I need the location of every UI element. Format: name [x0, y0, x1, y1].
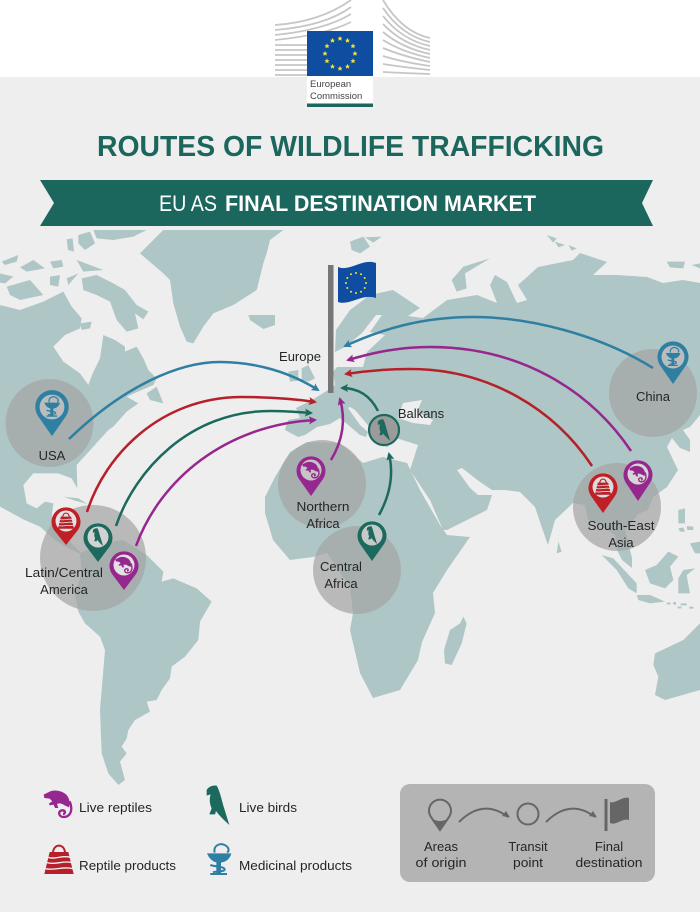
region labels [25, 349, 671, 597]
pin: USA medicinal [35, 390, 69, 436]
key labels: Areas [424, 839, 458, 854]
title: ROUTES OF WILDLIFE TRAFFICKING [97, 131, 604, 163]
region labels: Africa [324, 576, 358, 591]
legend: live birds: Live birds [239, 800, 298, 815]
European Commission logo [275, 0, 430, 107]
Africa [265, 442, 470, 698]
world map [0, 230, 700, 785]
region circles [6, 349, 697, 614]
header band [0, 0, 700, 77]
banner: EU AS [159, 191, 217, 216]
flagpole and EU flag [328, 262, 376, 393]
region labels: Asia [608, 535, 634, 550]
key labels: point [513, 855, 543, 870]
region labels: Northern [296, 499, 350, 514]
European Commission logo: European [310, 79, 351, 90]
region labels: Balkans [398, 406, 445, 421]
North America and Arctic [0, 230, 315, 553]
key panel [400, 784, 655, 882]
region labels: Central [320, 559, 362, 574]
arrowheads [502, 811, 597, 818]
icon: origin pin [429, 800, 451, 831]
Asian and Arctic islands [350, 235, 700, 292]
region labels: Africa [306, 516, 340, 531]
Black Sea [398, 400, 433, 425]
pin: South-East Asia reptile products [588, 473, 618, 513]
arrow: origin to transit [459, 809, 508, 822]
legend: reptile products [44, 846, 177, 874]
banner: FINAL DESTINATION MARKET [225, 191, 537, 216]
icon: destination flag [604, 798, 629, 831]
pin: China medicinal [658, 341, 688, 384]
key labels: Transit [508, 839, 548, 854]
region labels: China [636, 389, 671, 404]
legend: live birds [207, 786, 298, 825]
banner [40, 180, 653, 226]
legend: medicinal products: Medicinal products [239, 858, 353, 873]
region labels: Latin/Central [25, 565, 103, 580]
pin: Latin America live reptiles [110, 551, 138, 590]
key labels [416, 839, 642, 870]
transit point: Balkans [369, 415, 399, 445]
icon: transit circle [518, 804, 538, 824]
key labels: Final [595, 839, 623, 854]
legend: medicinal products [207, 844, 353, 875]
pin: Latin America reptile products [52, 507, 80, 545]
pin: Central Africa live birds [358, 521, 386, 561]
key labels: destination [576, 855, 642, 870]
region labels: America [40, 582, 89, 597]
Indian Ocean islands and Australia [444, 508, 700, 700]
region labels: USA [39, 448, 66, 463]
legend: reptile products: Reptile products [79, 858, 177, 873]
route arrows [69, 317, 653, 546]
pin: Northern Africa live reptiles [296, 456, 326, 496]
South America [75, 540, 212, 785]
pin: South-East Asia live reptiles [624, 460, 652, 501]
Eurasia [285, 253, 700, 568]
region labels: South-East [588, 518, 655, 533]
legend: live reptiles: Live reptiles [79, 800, 153, 815]
region labels: Europe [279, 349, 321, 364]
European Commission logo: Commission [310, 91, 362, 102]
arrow: transit to destination [546, 809, 595, 822]
key labels: of origin [416, 855, 466, 870]
legend: live reptiles [44, 790, 153, 817]
pin: Latin America live birds [84, 523, 112, 562]
